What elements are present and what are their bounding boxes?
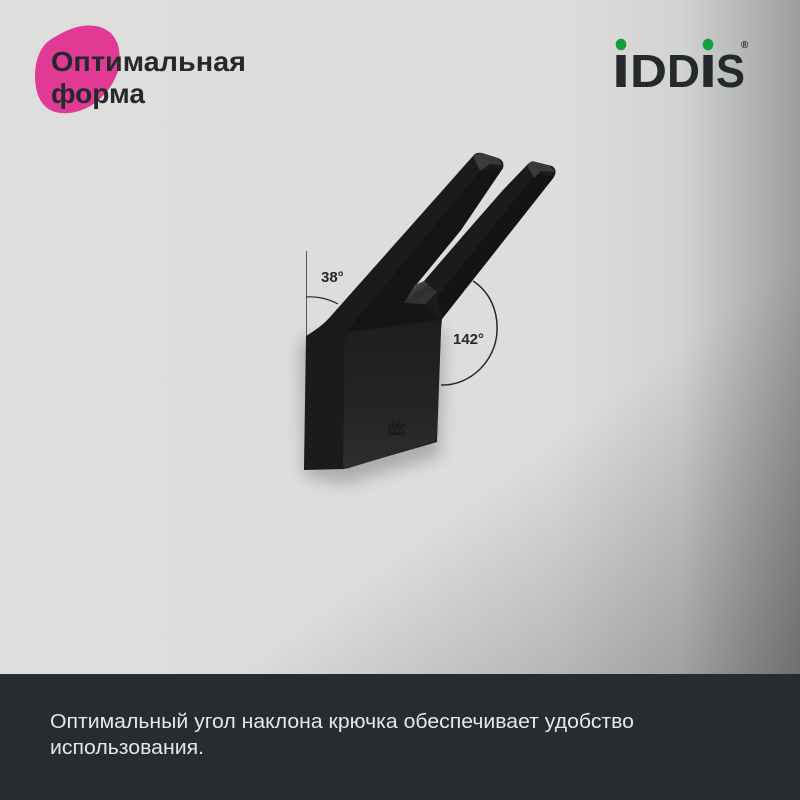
caption text bbox=[50, 711, 634, 759]
logo: IDDIS bbox=[612, 39, 749, 97]
logo wordmark: D bbox=[630, 45, 667, 97]
vertical guide line bbox=[306, 251, 308, 345]
angle annotation 38 degrees bbox=[306, 251, 344, 345]
black double hook bbox=[304, 153, 556, 470]
heading bbox=[51, 46, 246, 109]
logo wordmark: S bbox=[716, 45, 745, 97]
hook shadow bbox=[300, 330, 444, 484]
arc 142 bbox=[441, 281, 497, 385]
right tip top bbox=[532, 161, 555, 172]
angle annotation 142 degrees bbox=[441, 281, 497, 385]
left tip top bbox=[480, 153, 503, 165]
label 142: 142° bbox=[453, 331, 484, 348]
arc 38 bbox=[306, 297, 338, 304]
caption band bbox=[0, 674, 800, 800]
logo wordmark bbox=[612, 45, 745, 97]
logo wordmark: D bbox=[667, 45, 700, 97]
logo wordmark: I bbox=[699, 45, 717, 97]
pink blob behind heading bbox=[35, 25, 120, 113]
logo registered mark: ® bbox=[741, 40, 749, 51]
caption text: Оптимальный угол наклона крючка обеспечивает удобство bbox=[50, 711, 634, 733]
left tip highlight bbox=[473, 153, 490, 171]
black double hook: iddis bbox=[388, 418, 405, 440]
slot chamfer highlight bbox=[404, 281, 437, 304]
logo wordmark: I bbox=[612, 45, 630, 97]
caption text: использования. bbox=[50, 737, 204, 759]
front plate bbox=[343, 322, 441, 469]
heading: форма bbox=[51, 78, 145, 109]
label 38: 38° bbox=[321, 269, 344, 286]
heading: Оптимальная bbox=[51, 46, 246, 77]
right arm dark facet bbox=[437, 173, 554, 319]
right tip highlight bbox=[527, 161, 541, 178]
logo dots bbox=[616, 39, 713, 50]
left arm dark facet bbox=[346, 168, 503, 332]
hook body and arms bbox=[304, 153, 556, 470]
